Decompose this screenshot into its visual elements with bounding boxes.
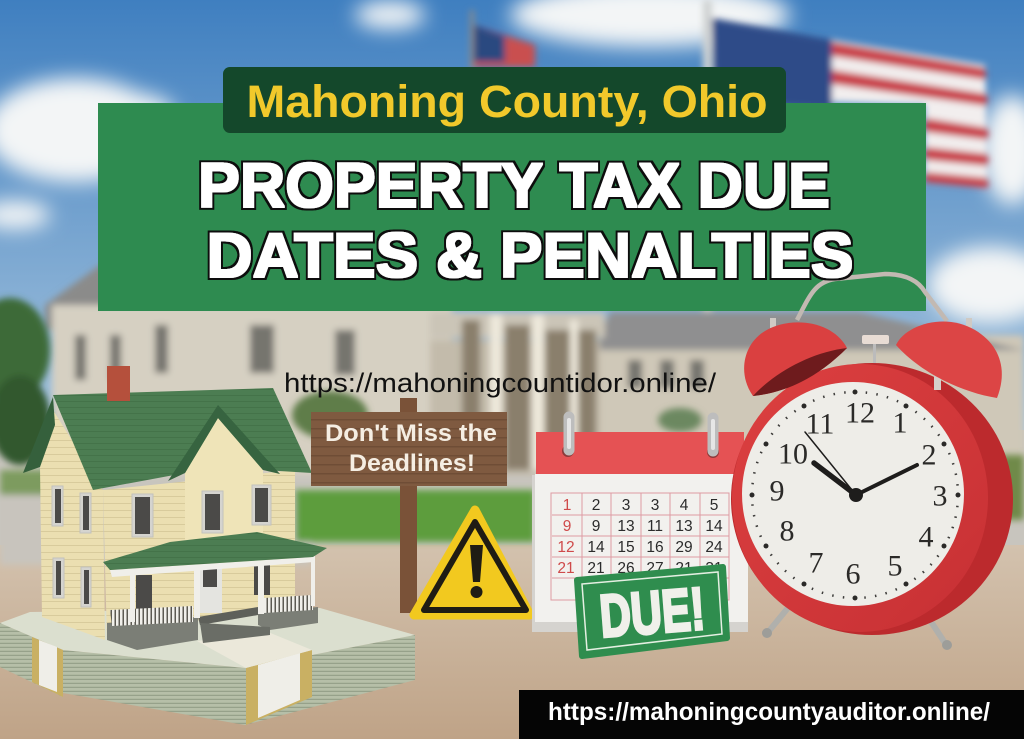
money stack <box>0 608 415 725</box>
clock ticks <box>750 390 960 600</box>
calendar dates: 12 <box>557 539 575 556</box>
wooden table surface <box>0 545 1024 739</box>
icon: yellow warning triangle <box>414 510 530 615</box>
house front wall <box>103 470 295 640</box>
calendar grid <box>551 493 729 600</box>
clock hands <box>805 432 917 502</box>
windows <box>52 485 271 607</box>
calendar dates: 21 <box>557 560 575 577</box>
calendar dates: 3 <box>622 497 630 514</box>
url text: center link: https://mahoningcountidor.online/ <box>284 368 717 398</box>
green DUE tag <box>577 567 727 656</box>
bell left <box>744 318 847 396</box>
calendar dates: 31 <box>705 560 723 577</box>
calendar dates: 24 <box>705 539 723 556</box>
house left wall <box>40 410 105 640</box>
clock numerals: 3 <box>932 480 948 512</box>
sign: Don't Miss the Deadlines: Deadlines! <box>349 450 475 477</box>
background: American flags <box>470 0 988 320</box>
chimney <box>107 366 130 401</box>
clock handle <box>797 274 947 321</box>
porch base and steps <box>107 607 318 650</box>
calendar dates: 14 <box>705 518 723 535</box>
porch door <box>200 568 222 613</box>
calendar dates: 13 <box>617 518 635 535</box>
hammer <box>862 335 889 366</box>
background: trees, lawn and road <box>0 298 1024 565</box>
url bar: bottom link <box>519 690 1024 739</box>
calendar dates: 11 <box>647 518 663 535</box>
sign: Don't Miss the Deadlines <box>311 398 507 613</box>
porch rails <box>110 595 313 626</box>
calendar dates: 21 <box>587 560 605 577</box>
title: property tax due dates and penalties: PROPERTY TAX DUE <box>198 151 830 221</box>
title: property tax due dates and penalties: DATES & PENALTIES <box>206 221 854 291</box>
calendar dates: 5 <box>710 497 718 514</box>
clock numerals: 1 <box>892 406 908 440</box>
clock numerals: 5 <box>888 550 902 582</box>
clock feet <box>762 603 952 650</box>
clock numerals: 12 <box>845 396 875 430</box>
calendar dates: 21 <box>675 560 693 577</box>
pill: county name <box>223 67 786 133</box>
icon: calendar with due tag <box>532 417 748 656</box>
calendar dates: 9 <box>563 518 571 535</box>
banner: green title panel <box>98 103 926 311</box>
clock numerals: 11 <box>806 408 834 440</box>
sign: Don't Miss the Deadlines: Don't Miss the <box>325 420 497 447</box>
calendar dates: 3 <box>651 497 659 514</box>
porch roof <box>110 557 314 577</box>
title: property tax due dates and penalties <box>198 151 854 291</box>
calendar dates: 29 <box>675 539 693 556</box>
calendar page stack <box>532 475 748 632</box>
icon: house on stack of money <box>0 366 415 725</box>
calendar dates: 2 <box>592 497 600 514</box>
clock numerals: 4 <box>918 520 934 554</box>
calendar dates: 13 <box>675 518 693 535</box>
url bar: bottom link: https://mahoningcountyauditor.online/ <box>548 698 990 726</box>
clock numerals: 6 <box>846 558 860 590</box>
bell right <box>896 318 1002 398</box>
calendar dates <box>557 497 723 577</box>
clock numerals <box>770 396 948 590</box>
calendar dates: 16 <box>646 539 664 556</box>
clock body <box>731 363 1013 635</box>
porch columns <box>130 556 315 622</box>
calendar red header <box>536 432 744 474</box>
clock numerals: 10 <box>778 438 808 470</box>
clock numerals: 8 <box>780 514 794 548</box>
clock numerals: 7 <box>808 546 824 580</box>
calendar rings <box>562 417 719 458</box>
clock face <box>742 382 964 606</box>
background: blurred courthouse building <box>45 265 1024 475</box>
calendar dates: 14 <box>587 539 605 556</box>
calendar dates: 27 <box>646 560 664 577</box>
clock numerals: 2 <box>922 438 936 472</box>
calendar dates: 15 <box>617 539 635 556</box>
house main roof <box>53 388 312 490</box>
icon: red alarm clock <box>731 274 1013 650</box>
calendar dates: 26 <box>617 560 635 577</box>
calendar dates: 1 <box>563 497 571 514</box>
calendar dates: 9 <box>592 518 600 535</box>
green DUE tag: DUE! <box>597 575 707 650</box>
background: blurred sky with clouds <box>0 0 1024 560</box>
clock numerals: 9 <box>770 474 784 508</box>
calendar dates: 4 <box>680 497 689 514</box>
pill: county name: Mahoning County, Ohio <box>246 76 768 127</box>
